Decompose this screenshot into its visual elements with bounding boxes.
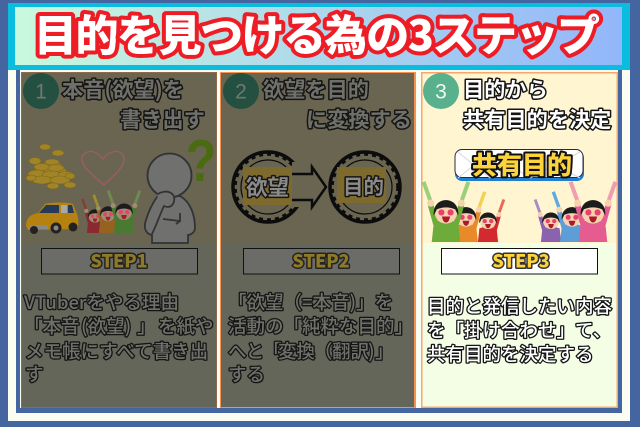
- icon: step number 1: 1: [35, 80, 47, 104]
- text block: step 1 description: す: [25, 361, 44, 387]
- text block: step 2 description: 「欲望（=本音)」を: [228, 289, 393, 315]
- text block: step 2 description: [228, 289, 413, 387]
- step label: STEP1: STEP1: [90, 248, 148, 274]
- text block: step 2 description: ): [368, 338, 375, 364]
- text block: step 2 description: 変換: [278, 338, 315, 364]
- icon: left fans: [424, 182, 504, 242]
- text block: step 3 description: 共有目的を決定する: [427, 341, 594, 367]
- panel: step 2: [220, 72, 416, 408]
- text block: step 3 description: 目的と発信したい内容: [427, 293, 612, 319]
- text block: step 2 description: 」: [375, 338, 394, 364]
- text block: step 2 description: する: [228, 361, 265, 387]
- text block: step 1 description: (欲望): [81, 313, 131, 339]
- heading: step 2: に変換する: [306, 103, 412, 134]
- step label: STEP3: STEP3: [492, 248, 550, 274]
- icon: gold coins: [26, 144, 76, 189]
- label: 目的: [337, 167, 386, 203]
- text block: step 1 description: VTuberをやる理由: [23, 289, 179, 315]
- icon: thinking person: [145, 154, 195, 243]
- badge: 共有目的: 共有目的: [472, 146, 572, 182]
- text block: step 1 description: を紙や: [158, 313, 214, 339]
- arrow: desire to purpose: [292, 167, 326, 207]
- icon: heart outline: [82, 151, 124, 185]
- heading: step 3: 共有目的を決定: [463, 103, 611, 134]
- text block: step 2 description: 活動の「純粋な目的」: [228, 313, 413, 339]
- icon: step number 1: [23, 73, 59, 109]
- panel: step 3: [421, 72, 618, 408]
- icon: question mark: ?: [186, 127, 216, 194]
- heading: step 1: [62, 73, 205, 134]
- text block: step 1 description: メモ帳にすべて書き出: [25, 338, 208, 364]
- icon: step number 3: 3: [435, 80, 447, 104]
- icon: left gear: [233, 152, 307, 222]
- text block: step 1 description: 「本音: [24, 313, 80, 339]
- icon: cheering fans: [82, 191, 140, 233]
- step label: STEP2: STEP2: [292, 248, 350, 274]
- heading: step 3: 目的から: [463, 73, 548, 104]
- text block: step 3 description: を「掛け合わせ」て、: [427, 317, 611, 343]
- inner blue frame: [16, 60, 622, 413]
- text block: step 2 description: 翻訳: [332, 338, 370, 364]
- icon: step number 3: [423, 73, 459, 109]
- text block: step 2 description: （: [314, 338, 333, 364]
- step label: STEP3: [442, 248, 598, 274]
- icon: step number 2: [223, 73, 259, 109]
- icon: step number 2: 2: [235, 80, 247, 104]
- label: 目的: 目的: [343, 170, 384, 200]
- icon: right fans: [535, 182, 615, 242]
- text block: step 1 description: 」: [137, 313, 156, 339]
- step label: STEP2: [244, 248, 400, 274]
- text block: step 2 description: へと: [228, 338, 264, 364]
- heading: step 2: 欲望を目的: [263, 73, 369, 104]
- icon: orange car: [26, 202, 78, 234]
- title: 目的を見つける為の3ステップ: [34, 2, 600, 64]
- text block: step 2 description: 「: [263, 338, 282, 364]
- text block: step 3 description: [427, 293, 612, 367]
- panel: step 1: [21, 72, 217, 408]
- heading: step 1: 本音(欲望)を: [62, 73, 184, 104]
- heading: step 3: [463, 73, 611, 134]
- title band: [8, 2, 630, 70]
- step label: STEP1: [42, 248, 198, 274]
- heading: step 2: [263, 73, 412, 134]
- icon: right gear: [330, 152, 400, 222]
- inner cream area: [20, 60, 618, 408]
- label: 欲望: 欲望: [246, 171, 289, 202]
- text block: step 1 description: [23, 289, 214, 387]
- heading: step 1: 書き出す: [120, 103, 205, 134]
